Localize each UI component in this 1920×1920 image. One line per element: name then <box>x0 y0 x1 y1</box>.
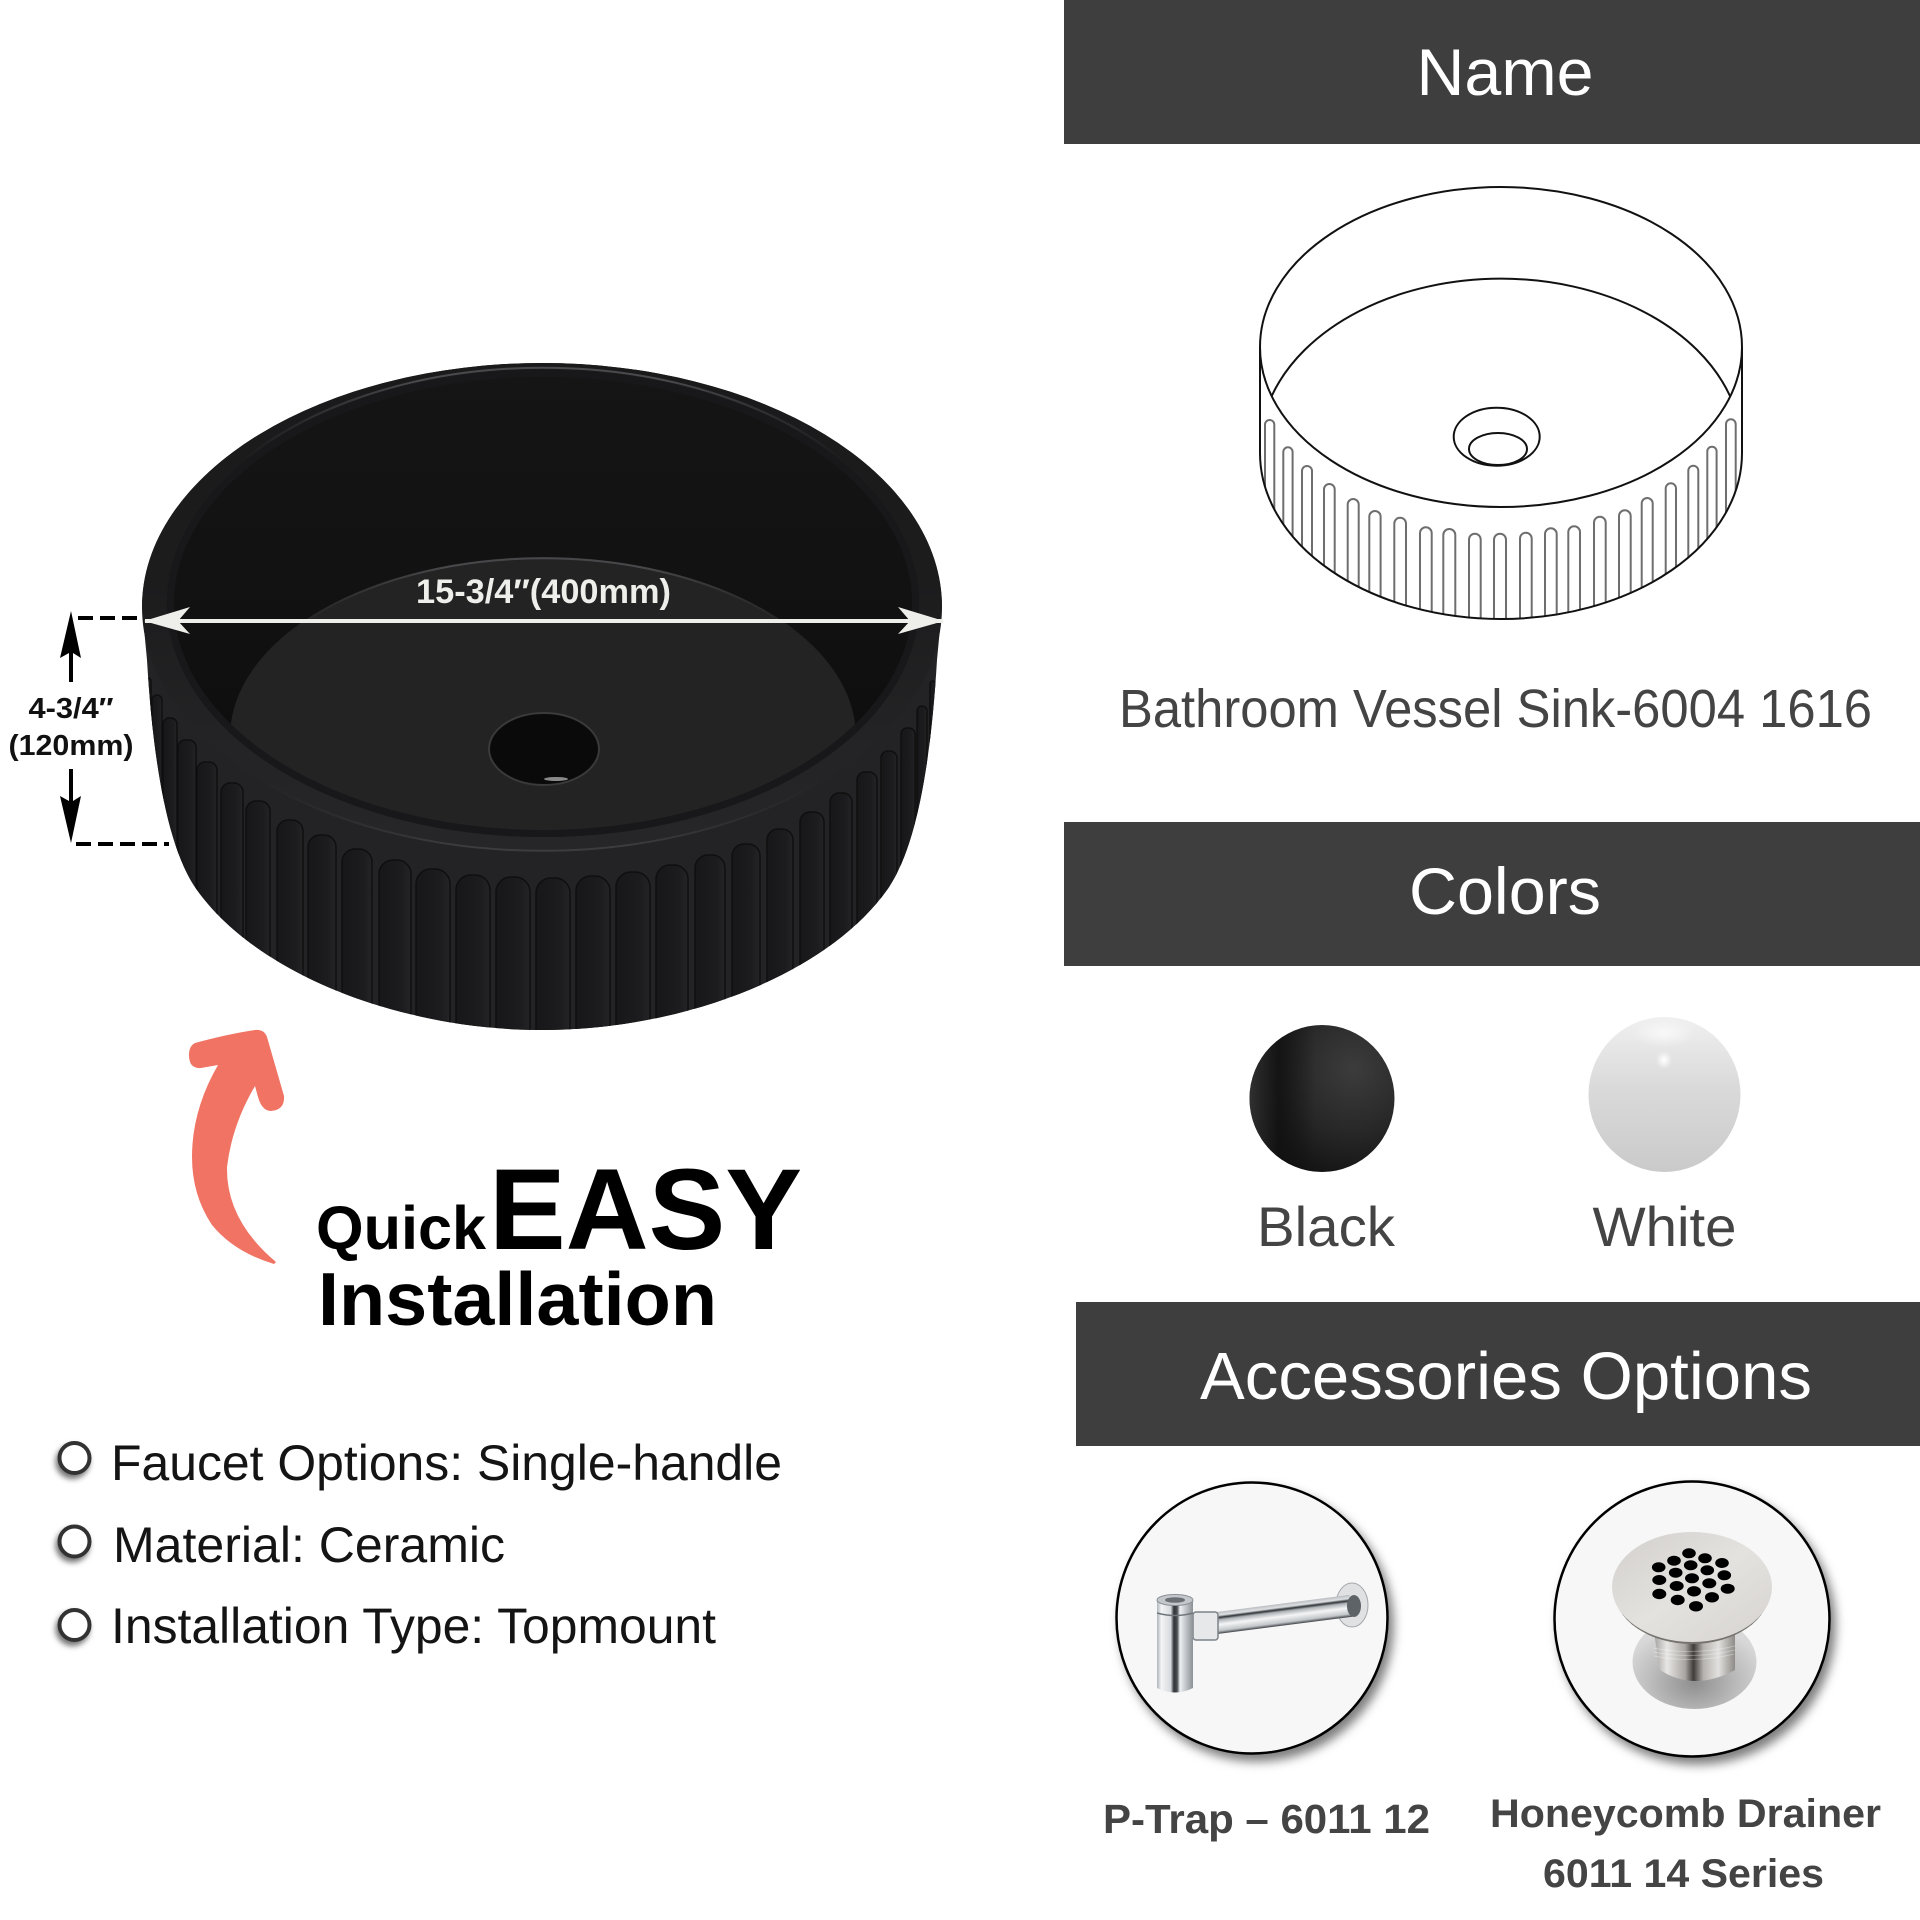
panel: accessories header: Accessories Options <box>1200 1339 1812 1414</box>
feature list <box>60 1435 782 1654</box>
icon: coral curved arrow <box>189 1030 284 1264</box>
height dimension label: (120mm) <box>8 730 134 762</box>
swatch: white <box>1588 1017 1740 1172</box>
drain rings <box>1454 408 1540 466</box>
panel: colors header <box>1064 822 1920 966</box>
line drawing of sink <box>1259 186 1743 620</box>
accessory: p-trap circle <box>1116 1482 1388 1754</box>
drain hole <box>489 713 599 785</box>
flutes <box>1264 418 1737 618</box>
fluted ribs <box>145 678 936 1052</box>
icon: bullet ring <box>60 1443 90 1473</box>
height dimension label <box>8 693 134 762</box>
heading: Quick EASY Installation <box>316 1146 802 1341</box>
swatch: black <box>1250 1025 1394 1172</box>
panel: name header <box>1064 0 1920 144</box>
icon: bullet ring <box>60 1526 90 1556</box>
accessory: honeycomb drainer circle <box>1554 1482 1830 1756</box>
label: honeycomb drainer: 6011 14 Series <box>1543 1852 1824 1896</box>
feature: installation type: Installation Type: Topmount <box>111 1598 716 1654</box>
label: black: Black <box>1257 1195 1396 1258</box>
height dimension label: 4-3/4″ <box>28 693 114 725</box>
label: honeycomb drainer <box>1490 1792 1881 1896</box>
heading: Quick EASY Installation: EASY <box>489 1146 802 1274</box>
icon: bullet ring <box>60 1610 90 1640</box>
inner back edge <box>1272 279 1730 396</box>
sink rim <box>142 363 942 851</box>
product name: Bathroom Vessel Sink-6004 1616 <box>1119 679 1872 739</box>
panel: name header: Name <box>1416 35 1594 109</box>
body outline <box>1260 347 1742 619</box>
label: white: White <box>1592 1195 1736 1258</box>
feature: material: Material: Ceramic <box>113 1517 505 1573</box>
sink photo: black fluted vessel sink <box>142 363 942 1052</box>
icon: p-trap <box>1157 1583 1368 1692</box>
outer rim <box>1260 187 1742 507</box>
label: p-trap: P-Trap – 6011 12 <box>1103 1796 1430 1842</box>
sink basin interior <box>167 370 919 837</box>
feature: faucet options: Faucet Options: Single-handle <box>111 1435 782 1491</box>
label: honeycomb drainer: Honeycomb Drainer <box>1490 1792 1881 1836</box>
rim front edge highlight <box>262 781 822 851</box>
height dimension markers <box>60 611 169 844</box>
heading: Quick EASY Installation: Quick <box>316 1194 486 1262</box>
heading: Quick EASY Installation: Installation <box>318 1257 717 1341</box>
panel: accessories header <box>1076 1302 1920 1446</box>
icon: honeycomb drainer <box>1612 1532 1772 1709</box>
width dimension arrow <box>144 607 944 634</box>
panel: colors header: Colors <box>1409 854 1601 928</box>
basin floor <box>168 557 918 837</box>
rim top highlight <box>240 368 846 463</box>
sink body silhouette <box>142 363 942 1030</box>
width dimension label: 15-3/4″(400mm) <box>416 573 671 611</box>
